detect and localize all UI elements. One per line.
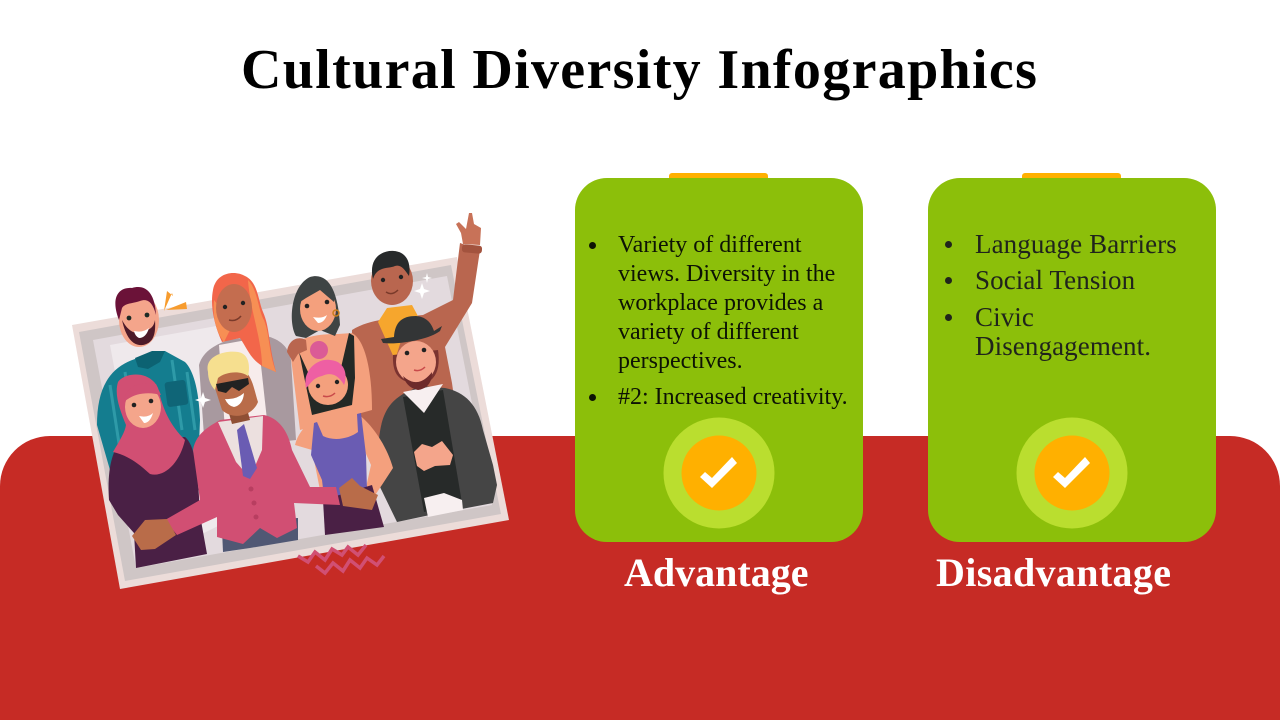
icon: advantage check badge	[664, 418, 774, 528]
accent tab: advantage	[669, 173, 768, 181]
bullet list: advantage	[589, 232, 848, 410]
person: woman in hijab	[109, 374, 207, 568]
bullet list: advantage: Variety of different	[618, 232, 801, 258]
photo frame	[72, 257, 509, 589]
person: man in brown jacket waving	[350, 213, 482, 460]
person: man with sunglasses in pink suit	[132, 352, 378, 552]
bullet list: advantage: variety of different	[618, 319, 799, 345]
title: Cultural Diversity Infographics	[241, 39, 1038, 101]
panel: advantage	[575, 173, 863, 595]
panel: disadvantage	[928, 173, 1216, 595]
card: advantage	[575, 178, 863, 542]
person: man with hat in dark jacket	[378, 316, 497, 522]
red background band	[0, 436, 1280, 720]
accent tab: disadvantage	[1022, 173, 1121, 181]
card: disadvantage	[928, 178, 1216, 542]
bullet list: disadvantage: Civic	[975, 302, 1034, 332]
heading: advantage: Advantage	[624, 550, 808, 595]
bullet list: advantage: perspectives.	[618, 348, 743, 374]
bullet list: disadvantage: Social Tension	[975, 265, 1135, 295]
bullet list: disadvantage: Language Barriers	[975, 229, 1177, 259]
bullet list: advantage: #2: Increased creativity.	[618, 384, 848, 410]
bullet list: disadvantage	[945, 229, 1177, 361]
illustration: group photo of diverse people	[72, 213, 509, 589]
person: woman with black hair	[287, 276, 372, 430]
bullet list: advantage: views. Diversity in the	[618, 261, 835, 287]
icon: disadvantage check badge	[1016, 418, 1128, 528]
person: man in teal shirt	[97, 287, 200, 470]
decorative zigzag lines	[298, 545, 384, 573]
person: woman with orange hair	[199, 273, 296, 450]
bullet list: disadvantage: Disengagement.	[975, 331, 1151, 361]
bullet list: advantage: workplace provides a	[618, 290, 823, 316]
heading: disadvantage: Disadvantage	[936, 550, 1171, 595]
person: woman with pink hair	[295, 341, 393, 535]
